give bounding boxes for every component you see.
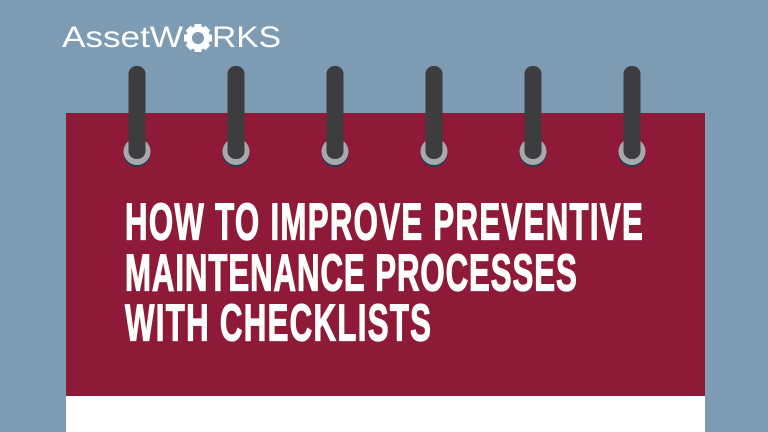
ring 5 — [520, 66, 546, 167]
title: MAINTENANCE PROCESSES — [125, 244, 577, 303]
panel: calendar header red — [66, 113, 705, 396]
logo: AssetWORKS: AssetW — [62, 21, 184, 54]
logo: AssetWORKS — [62, 21, 281, 54]
title: HOW TO IMPROVE PREVENTIVE — [125, 193, 643, 252]
ring 2 — [222, 66, 250, 167]
panel: calendar page white base — [66, 395, 705, 432]
ring 1 — [124, 66, 150, 167]
title: WITH CHECKLISTS — [125, 294, 431, 353]
icon: gear replacing the letter O — [184, 24, 212, 52]
title — [125, 193, 643, 353]
ring 4 — [420, 66, 448, 167]
calendar binding rings — [124, 66, 646, 167]
ring 6 — [618, 66, 646, 167]
logo: AssetWORKS: RKS — [212, 21, 281, 54]
ring 3 — [322, 66, 348, 167]
